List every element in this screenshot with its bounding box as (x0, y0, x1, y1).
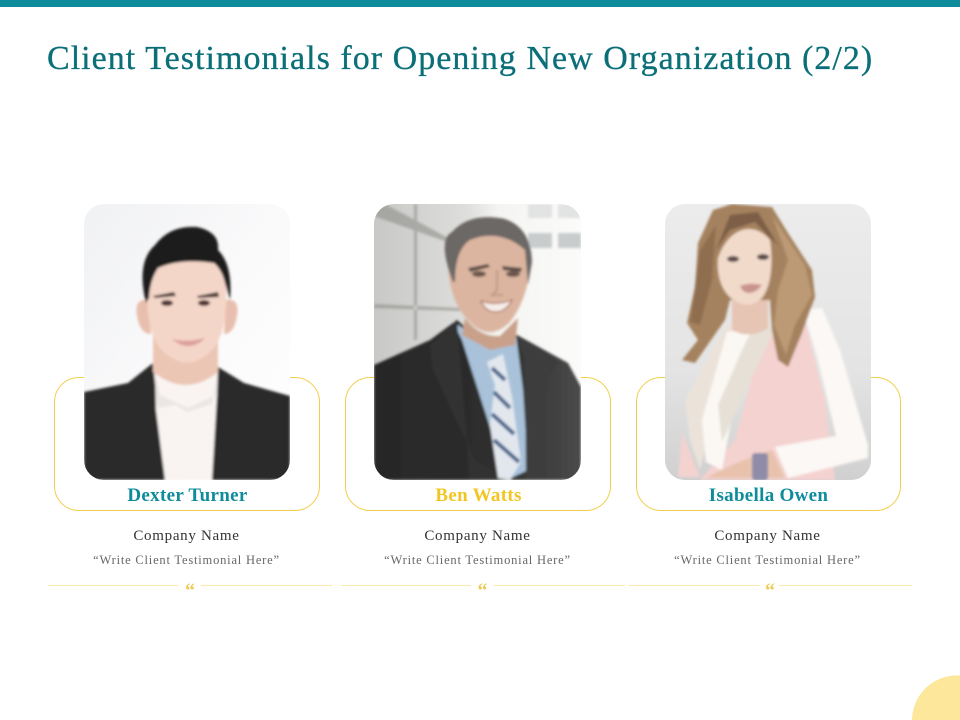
name: Dexter Turner: Dexter Turner (127, 485, 248, 506)
photo: Isabella Owen (665, 204, 871, 480)
name: Ben Watts: Ben Watts (435, 485, 522, 506)
card outline: Ben Watts (345, 377, 611, 511)
title: Client Testimonials for Opening New Organization (2/2) (47, 40, 873, 77)
top bar (0, 0, 960, 7)
name: Isabella Owen: Isabella Owen (709, 485, 828, 506)
testimonial: column 1: “Write Client Testimonial Here” (93, 553, 280, 567)
card outline: Isabella Owen (636, 377, 901, 511)
card outline: Dexter Turner (54, 377, 320, 511)
divider with quote: column 1: “ (185, 580, 195, 602)
photo: Ben Watts (374, 204, 581, 480)
testimonial: column 2: “Write Client Testimonial Here” (384, 553, 571, 567)
testimonial: column 3: “Write Client Testimonial Here” (674, 553, 861, 567)
company: column 2: Company Name (424, 528, 531, 544)
corner circle (912, 675, 960, 720)
divider with quote: column 2: “ (478, 580, 488, 602)
company: column 3: Company Name (714, 528, 821, 544)
company: column 1: Company Name (133, 528, 240, 544)
divider with quote: column 3: “ (765, 580, 775, 602)
photo: Dexter Turner (84, 204, 290, 480)
